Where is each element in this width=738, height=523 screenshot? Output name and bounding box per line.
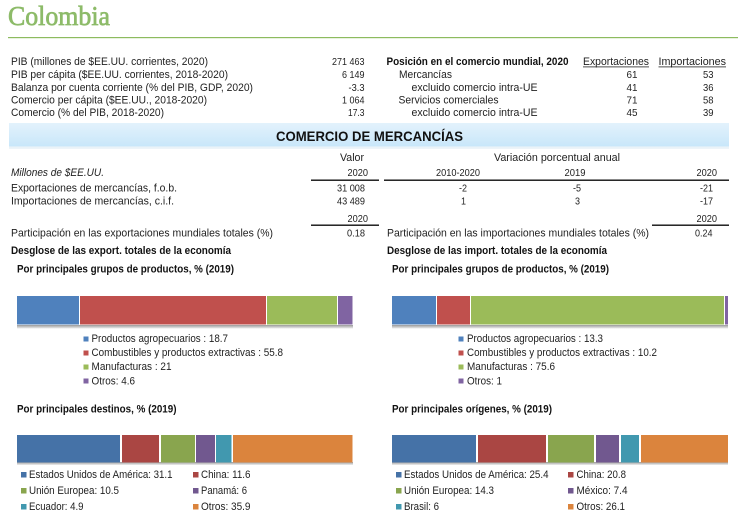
- heading: destinations: Por principales destinos, % (2019): [17, 404, 176, 416]
- panel: economic indicators: -3.3: [348, 83, 365, 94]
- legend: imports by product group: [458, 333, 657, 388]
- table: merchandise values: 2020: [696, 168, 717, 179]
- table: merchandise values: Participación en las exportaciones mundiales totales (%): [11, 228, 273, 240]
- legend: export destinations: China: 11.6: [201, 469, 251, 481]
- panel: world trade position: Posición en el comercio mundial, 2020: [386, 56, 569, 68]
- heading: export breakdown: [11, 245, 234, 276]
- panel: world trade position: excluido comercio intra-UE: [412, 82, 538, 94]
- bar chart: exports by product group: [17, 296, 353, 328]
- table: merchandise values: Millones de $EE.UU.: [11, 167, 104, 179]
- table: merchandise values: 0.18: [347, 228, 365, 240]
- legend: exports by product group: Productos agropecuarios : 18.7: [92, 333, 228, 345]
- legend: export destinations: Otros: 35.9: [201, 501, 251, 513]
- table: merchandise values: [11, 152, 729, 240]
- legend: export destinations: Estados Unidos de América: 31.1: [29, 469, 173, 481]
- heading: merchandise trade band: [9, 123, 729, 149]
- table: merchandise values: 2010-2020: [436, 168, 480, 179]
- legend: exports by product group: [84, 333, 283, 388]
- bar chart: import origins: [392, 435, 728, 465]
- panel: world trade position: excluido comercio intra-UE: [412, 107, 538, 119]
- legend: imports by product group: Combustibles y productos extractivas : 10.2: [467, 347, 657, 359]
- bar chart: imports by product group: [392, 296, 728, 328]
- heading: import breakdown: [387, 245, 609, 276]
- legend: export destinations: [21, 469, 251, 513]
- panel: world trade position: Servicios comerciales: [398, 94, 498, 106]
- panel: economic indicators: PIB (millones de $EE.UU. corrientes, 2020): [11, 56, 208, 68]
- panel: world trade position: 39: [703, 108, 714, 119]
- table: merchandise values: 1: [461, 196, 466, 208]
- panel: economic indicators: Comercio (% del PIB, 2018-2020): [11, 107, 164, 119]
- panel: economic indicators: PIB per cápita ($EE.UU. corrientes, 2018-2020): [11, 69, 228, 81]
- legend: import origins: Unión Europea: 14.3: [404, 485, 494, 497]
- legend: exports by product group: Combustibles y productos extractivas : 55.8: [92, 347, 283, 359]
- heading: export breakdown: Por principales grupos de productos, % (2019): [17, 264, 234, 276]
- panel: economic indicators: 1 064: [342, 96, 365, 106]
- legend: import origins: [396, 469, 628, 513]
- legend: import origins: Estados Unidos de América: 25.4: [404, 469, 549, 481]
- table: merchandise values: 3: [575, 196, 580, 208]
- heading: merchandise trade band: COMERCIO DE MERCANCÍAS: [276, 128, 463, 144]
- table: merchandise values: Variación porcentual anual: [494, 152, 620, 164]
- heading: export breakdown: Desglose de las export. totales de la economía: [11, 245, 231, 257]
- table: merchandise values: Valor: [340, 152, 364, 164]
- legend: export destinations: Ecuador: 4.9: [29, 501, 84, 513]
- legend: export destinations: Unión Europea: 10.5: [29, 485, 119, 497]
- panel: world trade position: 45: [626, 108, 638, 119]
- table: merchandise values: -21: [700, 184, 713, 194]
- panel: world trade position: 53: [703, 70, 714, 81]
- heading: origins: Por principales orígenes, % (2019): [392, 404, 552, 416]
- panel: world trade position: 36: [703, 83, 714, 94]
- panel: world trade position: Importaciones: [658, 56, 726, 68]
- legend: import origins: China: 20.8: [576, 469, 626, 481]
- legend: imports by product group: Manufacturas : 75.6: [467, 361, 555, 373]
- table: merchandise values: -5: [573, 184, 581, 194]
- panel: economic indicators: [11, 56, 365, 119]
- legend: export destinations: Panamá: 6: [201, 485, 247, 497]
- bar chart: export destinations: [17, 435, 353, 465]
- table: merchandise values: 43 489: [337, 196, 365, 208]
- panel: economic indicators: 271 463: [332, 57, 365, 68]
- legend: import origins: Otros: 26.1: [576, 501, 625, 513]
- legend: exports by product group: Otros: 4.6: [92, 376, 135, 388]
- panel: world trade position: 58: [703, 96, 714, 106]
- table: merchandise values: Exportaciones de mercancías, f.o.b.: [11, 182, 177, 194]
- legend: imports by product group: Productos agropecuarios : 13.3: [467, 333, 603, 345]
- title: Colombia: [8, 1, 110, 31]
- panel: world trade position: Mercancías: [399, 69, 452, 81]
- table: merchandise values: -17: [700, 196, 713, 208]
- table: merchandise values: -2: [459, 184, 467, 194]
- panel: world trade position: 71: [626, 96, 638, 106]
- panel: economic indicators: Balanza por cuenta corriente (% del PIB, GDP, 2020): [11, 82, 253, 94]
- legend: import origins: Brasil: 6: [404, 501, 439, 513]
- table: merchandise values: 2020: [348, 168, 368, 179]
- legend: exports by product group: Manufacturas : 21: [92, 361, 172, 373]
- table: merchandise values: 2019: [564, 168, 586, 179]
- table: merchandise values: 0.24: [695, 228, 713, 240]
- table: merchandise values: 2020: [348, 214, 368, 225]
- panel: world trade position: [386, 56, 726, 119]
- panel: economic indicators: 17.3: [348, 108, 365, 119]
- legend: import origins: México: 7.4: [576, 485, 628, 497]
- heading: import breakdown: Por principales grupos de productos, % (2019): [392, 264, 609, 276]
- panel: economic indicators: 6 149: [342, 70, 365, 81]
- table: merchandise values: 2020: [696, 214, 717, 225]
- legend: imports by product group: Otros: 1: [467, 376, 502, 388]
- table: merchandise values: 31 008: [337, 184, 365, 194]
- table: merchandise values: Importaciones de mercancías, c.i.f.: [11, 196, 174, 208]
- panel: world trade position: 41: [626, 83, 638, 94]
- heading: import breakdown: Desglose de las import. totales de la economía: [387, 245, 607, 257]
- table: merchandise values: Participación en las importaciones mundiales totales (%): [387, 228, 649, 240]
- panel: economic indicators: Comercio per cápita ($EE.UU., 2018-2020): [11, 94, 207, 106]
- panel: world trade position: Exportaciones: [583, 56, 649, 68]
- panel: world trade position: 61: [626, 70, 638, 81]
